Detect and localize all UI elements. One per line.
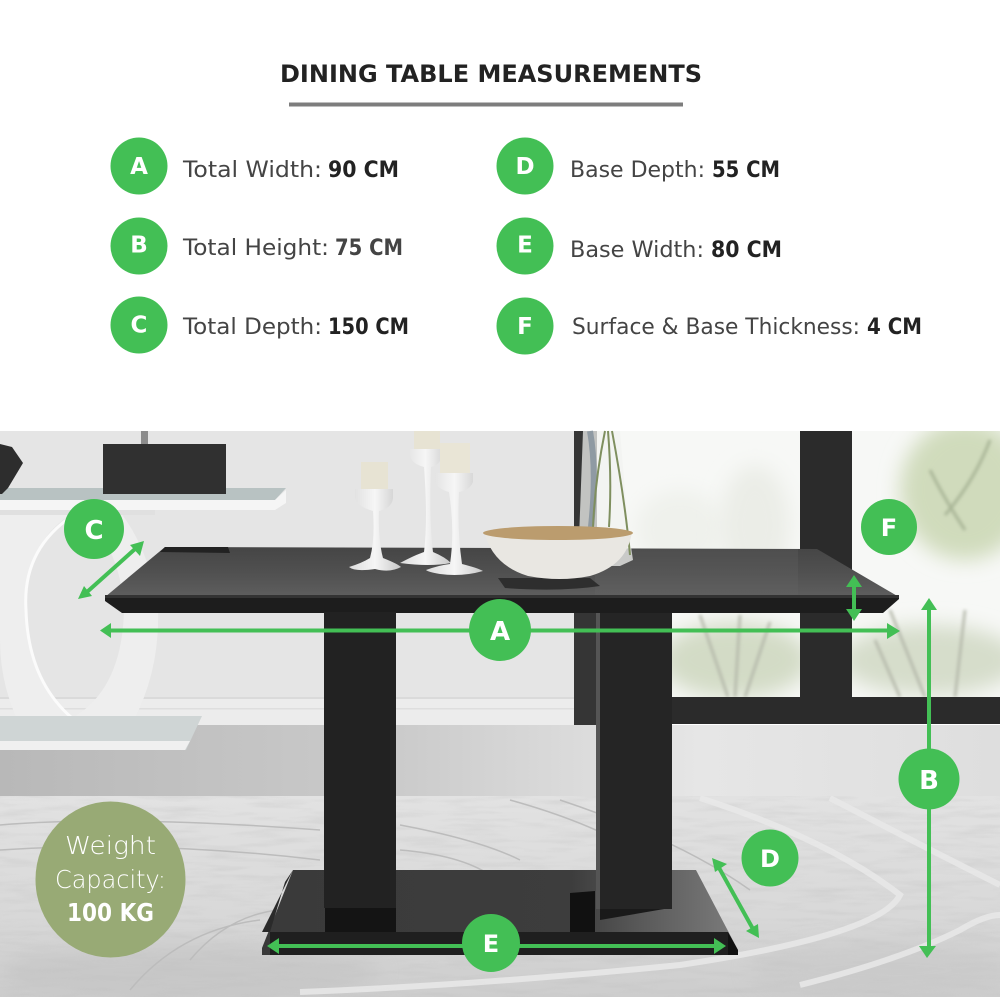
title underline [289,102,683,106]
wall [0,431,576,727]
item F: surface and base thickness: Surface & Base Thickness: [572,315,860,340]
arrow C: total depth: C [84,516,104,546]
callout: weight capacity [36,802,186,958]
table base [262,870,738,955]
item F: surface and base thickness [496,298,922,354]
item A: total width: A [130,154,148,180]
item D: base depth: 55 CM [712,158,780,183]
arrow C: total depth [64,499,144,599]
table top [105,547,899,613]
item E: base width: E [517,232,533,258]
item B: total height: B [130,232,148,258]
arrow E: base width: E [483,930,499,958]
item B: total height: Total Height: [182,236,329,261]
arrow B: total height: B [919,766,939,796]
legend: measurement list [110,138,922,354]
item C: total depth: 150 CM [328,315,409,340]
arrow A: total width [100,599,900,661]
right table leg [596,613,672,909]
item B: total height: 75 CM [335,236,403,261]
item A: total width: Total Width: [182,158,322,183]
item C: total depth: Total Depth: [182,315,322,340]
arrow D: base depth [712,830,798,938]
item D: base depth: Base Depth: [570,158,705,183]
photo: room scene with table [0,420,1000,1000]
console table [0,488,286,750]
item B: total height [110,218,403,274]
item A: total width [110,138,399,194]
callout: weight capacity: Weight [65,831,156,860]
arrow A: total width: A [490,617,510,647]
arrow F: surface thickness: F [881,514,897,542]
arrow B: total height [898,598,960,958]
window view [620,431,1000,697]
left table leg [324,612,396,908]
item F: surface and base thickness: 4 CM [867,315,922,340]
arrow F: surface thickness [846,499,917,621]
arrow D: base depth: D [760,845,780,873]
item E: base width: Base Width: [570,238,704,263]
rug [0,796,1000,1000]
candle holders [349,431,483,575]
title: DINING TABLE MEASUREMENTS [280,60,702,88]
item D: base depth: D [515,154,535,180]
item E: base width [496,218,782,274]
bowl [483,526,633,590]
callout: weight capacity: Capacity: [55,865,166,894]
floor [0,725,1000,797]
item F: surface and base thickness: F [517,314,533,340]
item A: total width: 90 CM [328,158,399,183]
glass vase [578,431,633,566]
wall skirting [0,697,574,725]
callout: weight capacity: 100 KG [67,898,154,927]
console decor: black box and vase [0,431,226,494]
window frame [574,431,1000,725]
item C: total depth [110,296,409,354]
item C: total depth: C [131,312,147,338]
item D: base depth [496,138,780,194]
arrow E: base width [267,914,726,972]
item E: base width: 80 CM [711,238,782,263]
